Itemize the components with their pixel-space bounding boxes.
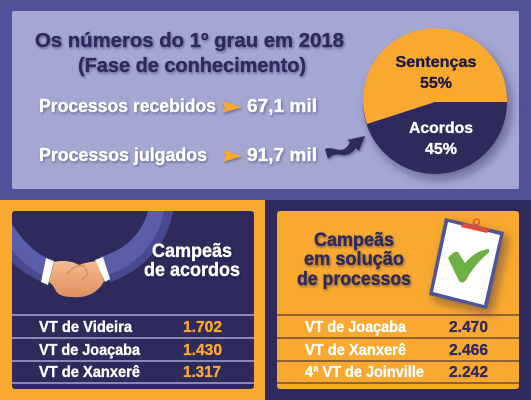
table rows: VT de Xanxerê	[305, 342, 406, 359]
panel: campeãs em solução de processos	[265, 200, 531, 400]
title: (Fase de conhecimento)	[78, 55, 306, 77]
pie chart	[363, 28, 507, 174]
stat: processos recebidos: Processos recebidos	[39, 96, 216, 116]
heading: Campeãs	[314, 230, 394, 251]
table rows: 1.317	[183, 364, 221, 381]
table rows: VT de Joaçaba	[305, 319, 406, 336]
table rows: VT de Joaçaba	[39, 342, 140, 359]
background	[0, 0, 531, 200]
label: acordos: Acordos	[409, 120, 473, 137]
table rows: 1.430	[183, 342, 222, 359]
heading	[297, 230, 411, 290]
heading: de processos	[297, 269, 411, 290]
table rows: 1.702	[183, 319, 222, 336]
label: sentenças: Sentenças	[396, 54, 477, 71]
panel: numbers of first degree	[12, 11, 519, 189]
stat: processos julgados	[39, 145, 317, 165]
label: acordos	[409, 120, 473, 158]
table rows	[39, 319, 222, 381]
heading	[144, 241, 240, 281]
stat: processos recebidos	[39, 96, 317, 116]
title	[35, 30, 344, 77]
label: sentenças: 55%	[420, 75, 452, 92]
label: sentenças	[396, 54, 477, 92]
icon: handshake	[12, 211, 173, 297]
table rows	[305, 319, 488, 381]
table rows: 4ª VT de Joinville	[305, 364, 424, 381]
table rows: VT de Xanxerê	[39, 364, 140, 381]
panel: campeãs de acordos	[0, 200, 265, 400]
heading: de acordos	[144, 260, 240, 281]
stat: processos julgados: 91,7 mil	[247, 145, 317, 165]
icon: clipboard with check	[429, 218, 504, 309]
table rows: VT de Videira	[39, 319, 132, 336]
table rows: 2.470	[449, 319, 488, 336]
table rows: 2.242	[449, 364, 488, 381]
arrow: curved to pie	[325, 136, 365, 159]
label: acordos: 45%	[425, 141, 457, 158]
heading: em solução	[304, 249, 404, 270]
title: Os números do 1º grau em 2018	[35, 30, 344, 52]
heading: Campeãs	[152, 241, 232, 262]
stat: processos julgados: Processos julgados	[39, 145, 207, 165]
stat: processos recebidos: 67,1 mil	[247, 96, 317, 116]
table rows: 2.466	[449, 342, 488, 359]
